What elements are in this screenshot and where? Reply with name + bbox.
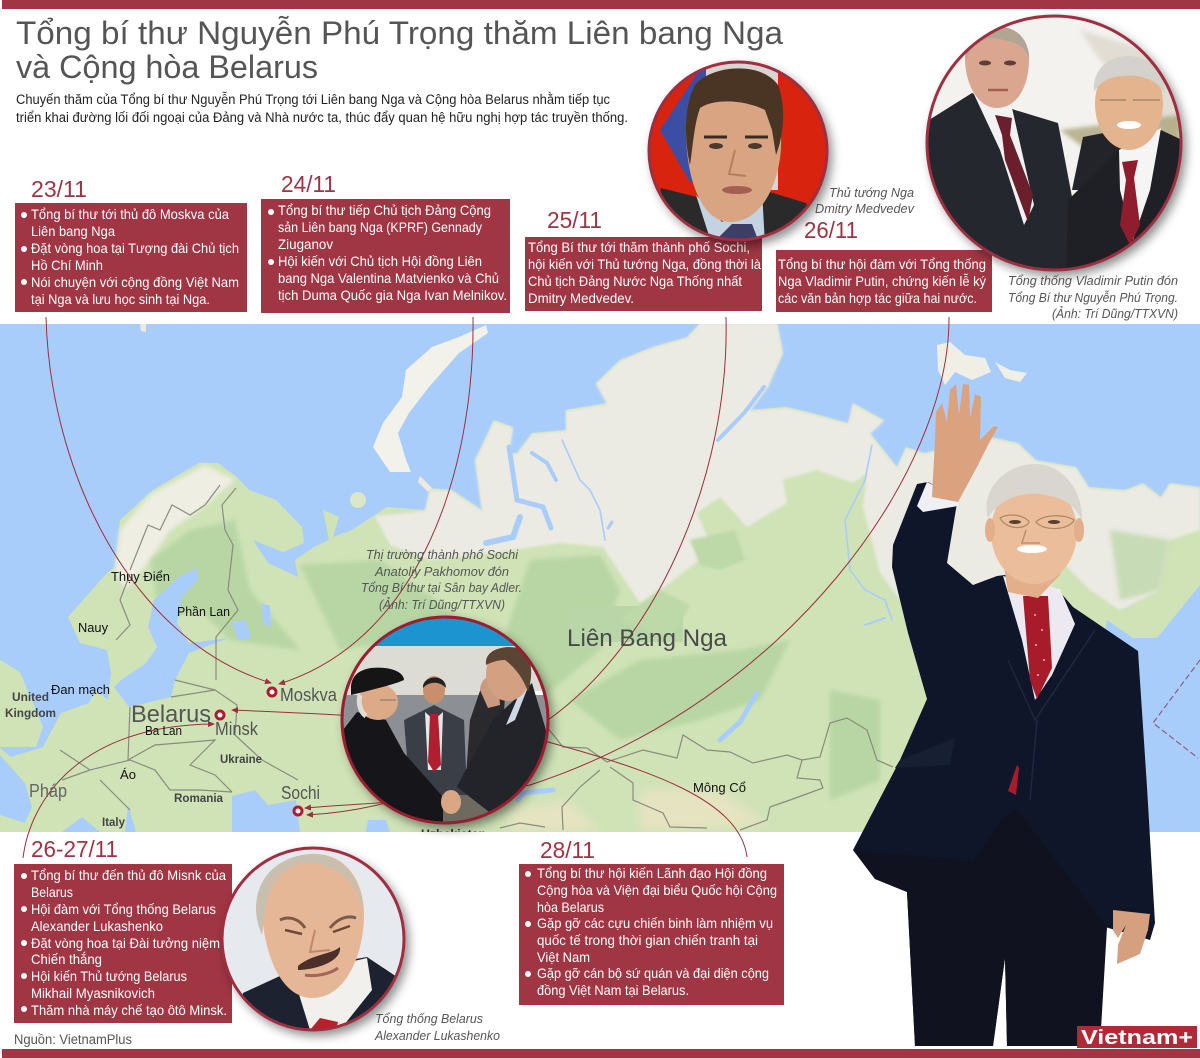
text 25/11: Tổng Bí thư tới thăm thành phố Sochi, [528, 240, 750, 255]
text 25/11: Chủ tịch Đảng Nước Nga Thống nhất [528, 274, 742, 289]
city label: Sochi: Sochi [281, 783, 320, 803]
box 25/11 [525, 237, 762, 311]
rivers and gulfs [486, 387, 892, 800]
arc: 26/11 to Sochi [305, 317, 949, 808]
country label: Phần Lan: Phần Lan [177, 604, 230, 619]
date 25/11: 25/11 [547, 207, 602, 233]
photo: Sochi airport welcome [340, 615, 550, 830]
map of Russia and Europe [0, 322, 1200, 841]
city label: Moskva: Moskva [280, 685, 338, 705]
arc: 26-27/11 to Minsk [23, 724, 214, 858]
text 26-27/11: Tổng bí thư đến thủ đô Misnk của [31, 868, 226, 883]
text 23/11 [31, 207, 239, 307]
marker: Minsk [216, 711, 224, 719]
box 24/11 [261, 199, 510, 313]
text 28/11: Gặp gỡ cán bộ sứ quán và đại diện cộng [537, 966, 769, 981]
text 24/11: Tổng bí thư tiếp Chủ tịch Đảng Cộng [278, 203, 491, 218]
text 26-27/11: Hội kiến Thủ tướng Belarus [31, 969, 187, 984]
city label: Minsk: Minsk [215, 719, 259, 739]
box 26-27/11 [14, 864, 232, 1023]
intro text: triển khai đường lối đối ngoại của Đảng và Nhà nước ta, thúc đẩy quan hệ hữu nghị hợp tác truyền thống. [16, 110, 628, 125]
text 24/11: Ziuganov [278, 237, 333, 252]
box 23/11 [15, 203, 247, 312]
caption: Putin and Trọng: Tổng thống Vladimir Putin đón [1008, 274, 1178, 288]
text 23/11: Nói chuyện với cộng đồng Việt Nam [31, 275, 239, 290]
text 23/11: tại Nga và lưu học sinh tại Nga. [31, 292, 210, 307]
text 26/11: Nga Vladimir Putin, chứng kiến lễ ký [778, 274, 986, 289]
text 26-27/11: Thăm nhà máy chế tạo ôtô Minsk. [31, 1003, 227, 1018]
bottom bar [2, 1049, 1200, 1058]
photo: Medvedev [640, 58, 840, 250]
caption: Lukashenko [374, 1012, 500, 1043]
marker: Moskva [268, 688, 276, 696]
country label: Italy: Italy [102, 815, 125, 829]
country label: Ukraine: Ukraine [220, 752, 262, 766]
date 23/11: 23/11 [31, 176, 87, 202]
date 26-27/11: 26-27/11 [31, 836, 118, 862]
country label: Áo: Áo [120, 767, 136, 782]
text 28/11: Tổng bí thư hội kiến Lãnh đạo Hội đồng [537, 866, 767, 881]
country label: Ba Lan: Ba Lan [145, 723, 182, 738]
title: Tổng bí thư Nguyễn Phú Trọng thăm Liên bang Nga [16, 15, 783, 51]
text 28/11: quốc tế trong thời gian chiến tranh tại [537, 933, 758, 948]
caption: Medvedev [815, 186, 915, 216]
map labels [5, 569, 746, 829]
text 28/11 [537, 866, 777, 998]
forest patches [150, 520, 1170, 800]
route arcs [23, 317, 949, 858]
caption: Putin and Trọng [1008, 274, 1178, 321]
country label: Romania: Romania [174, 791, 223, 805]
date 24/11: 24/11 [281, 171, 336, 197]
country label: Pháp: Pháp [29, 781, 67, 801]
intro text: Chuyến thăm của Tổng bí thư Nguyễn Phú Trọng tới Liên bang Nga và Cộng hòa Belarus nhằm tiếp tục [16, 92, 610, 107]
text 28/11: đồng Việt Nam tại Belarus. [537, 983, 689, 998]
text 26-27/11: Belarus [31, 885, 73, 900]
text 25/11: Dmitry Medvedev. [528, 291, 634, 306]
photo: Lukashenko [220, 845, 410, 1035]
text 24/11: tịch Duma Quốc gia Nga Ivan Melnikov. [278, 288, 507, 303]
box 26/11 [776, 250, 992, 312]
text 25/11: hội kiến với Thủ tướng Nga, đồng thời là [528, 257, 761, 272]
text 26-27/11: Đặt vòng hoa tại Đài tưởng niệm [31, 936, 220, 951]
bullets 24/11 [268, 209, 274, 265]
date 28/11: 28/11 [540, 837, 595, 863]
text 28/11: Cộng hòa và Viện đại biểu Quốc hội Cộng [537, 883, 777, 898]
logo: Vietnam+: Vietnam+ [1081, 1027, 1193, 1049]
country label: Mông Cổ: Mông Cổ [693, 780, 746, 795]
Baltic and seas [114, 567, 229, 707]
arc: 25/11 to Sochi [307, 317, 726, 815]
text 23/11: Liên bang Nga [31, 224, 115, 239]
text 24/11: bang Nga Valentina Matvienko và Chủ [278, 271, 499, 286]
caption: Sochi airport photo: Thị trường thành phố Sochi [366, 548, 519, 562]
title [16, 15, 783, 85]
arc: 28/11 to Minsk [232, 710, 747, 857]
text 26-27/11: Chiến thắng [31, 952, 102, 967]
photo: Putin and Trọng [920, 10, 1190, 280]
country label: Kingdom: Kingdom [5, 706, 56, 720]
panel: 26-27/11 [14, 836, 232, 1023]
caption: Sochi airport photo: (Ảnh: Trí Dũng/TTXVN) [379, 597, 505, 612]
arc: 24/11 to Moskva [279, 317, 473, 684]
caption: Sochi airport photo: Anatoliy Pakhomov đón [374, 565, 509, 579]
text 23/11: Tổng bí thư tới thủ đô Moskva của [31, 207, 229, 222]
text 23/11: Hồ Chí Minh [31, 258, 103, 273]
text 25/11 [528, 240, 761, 306]
panel: 25/11 [525, 207, 762, 311]
text 26/11: Tổng bí thư hội đàm với Tổng thống [778, 257, 986, 272]
caption: Sochi airport photo [361, 548, 522, 612]
text 26/11 [778, 257, 986, 306]
bullets 26-27/11 [21, 873, 27, 1012]
text 28/11: Việt Nam [537, 950, 590, 965]
date 26/11: 26/11 [804, 217, 858, 243]
title: và Cộng hòa Belarus [16, 49, 318, 85]
caption: Medvedev: Thủ tướng Nga [829, 186, 914, 200]
text 24/11: sản Liên bang Nga (KPRF) Gennady [278, 220, 482, 235]
text 26-27/11 [31, 868, 227, 1018]
text 26-27/11: Alexander Lukashenko [31, 919, 163, 934]
text 24/11 [278, 203, 507, 303]
illustration: waving leader figure [853, 384, 1155, 1046]
panel: 26/11 [776, 217, 992, 312]
bullets 28/11 [525, 871, 531, 977]
source note: Nguồn: VietnamPlus [14, 1032, 132, 1047]
bullets 23/11 [21, 212, 27, 285]
marker: Sochi [294, 807, 302, 815]
text 24/11: Hội kiến với Chủ tịch Hội đồng Liên [278, 254, 482, 269]
caption: Sochi airport photo: Tổng Bí thư tại Sân bay Adler. [361, 581, 522, 595]
country label: Uzbekistan: Uzbekistan [421, 827, 486, 841]
country label: Liên Bang Nga: Liên Bang Nga [567, 625, 728, 652]
text 26-27/11: Hội đàm với Tổng thống Belarus [31, 902, 216, 917]
top bar [2, 0, 1200, 9]
text 26/11: các văn bản hợp tác giữa hai nước. [778, 291, 977, 306]
dashed maritime line [1153, 660, 1200, 758]
text 26-27/11: Mikhail Myasnikovich [31, 986, 155, 1001]
country label: Belarus: Belarus [131, 701, 211, 728]
borders [60, 485, 893, 830]
text 23/11: Đặt vòng hoa tại Tượng đài Chủ tịch [31, 241, 239, 256]
box 28/11 [519, 864, 784, 1005]
text 28/11: hòa Belarus [537, 900, 604, 915]
caption: Lukashenko: Alexander Lukashenko [374, 1029, 500, 1043]
intro text [16, 92, 628, 125]
panel: 24/11 [261, 171, 510, 313]
country label: Đan mạch: Đan mạch [51, 682, 110, 697]
panel: 28/11 [519, 837, 784, 1005]
caption: Medvedev: Dmitry Medvedev [815, 202, 915, 216]
rectangular forest tile [603, 606, 683, 642]
text 28/11: Gặp gỡ các cựu chiến binh làm nhiệm vụ [537, 916, 773, 931]
country label: United Kingdom: United [12, 690, 49, 704]
country label: Thụy Điển: Thụy Điển [111, 569, 170, 584]
caption: Putin and Trọng: (Ảnh: Trí Dũng/TTXVN) [1052, 306, 1178, 321]
caption: Putin and Trọng: Tổng Bí thư Nguyễn Phú Trọng. [1008, 290, 1178, 305]
caption: Lukashenko: Tổng thống Belarus [375, 1012, 483, 1026]
arc: 23/11 to Moskva [46, 317, 271, 683]
north beige band [375, 323, 1200, 620]
panel: 23/11 [15, 176, 247, 312]
country label: Nauy: Nauy [78, 620, 108, 635]
